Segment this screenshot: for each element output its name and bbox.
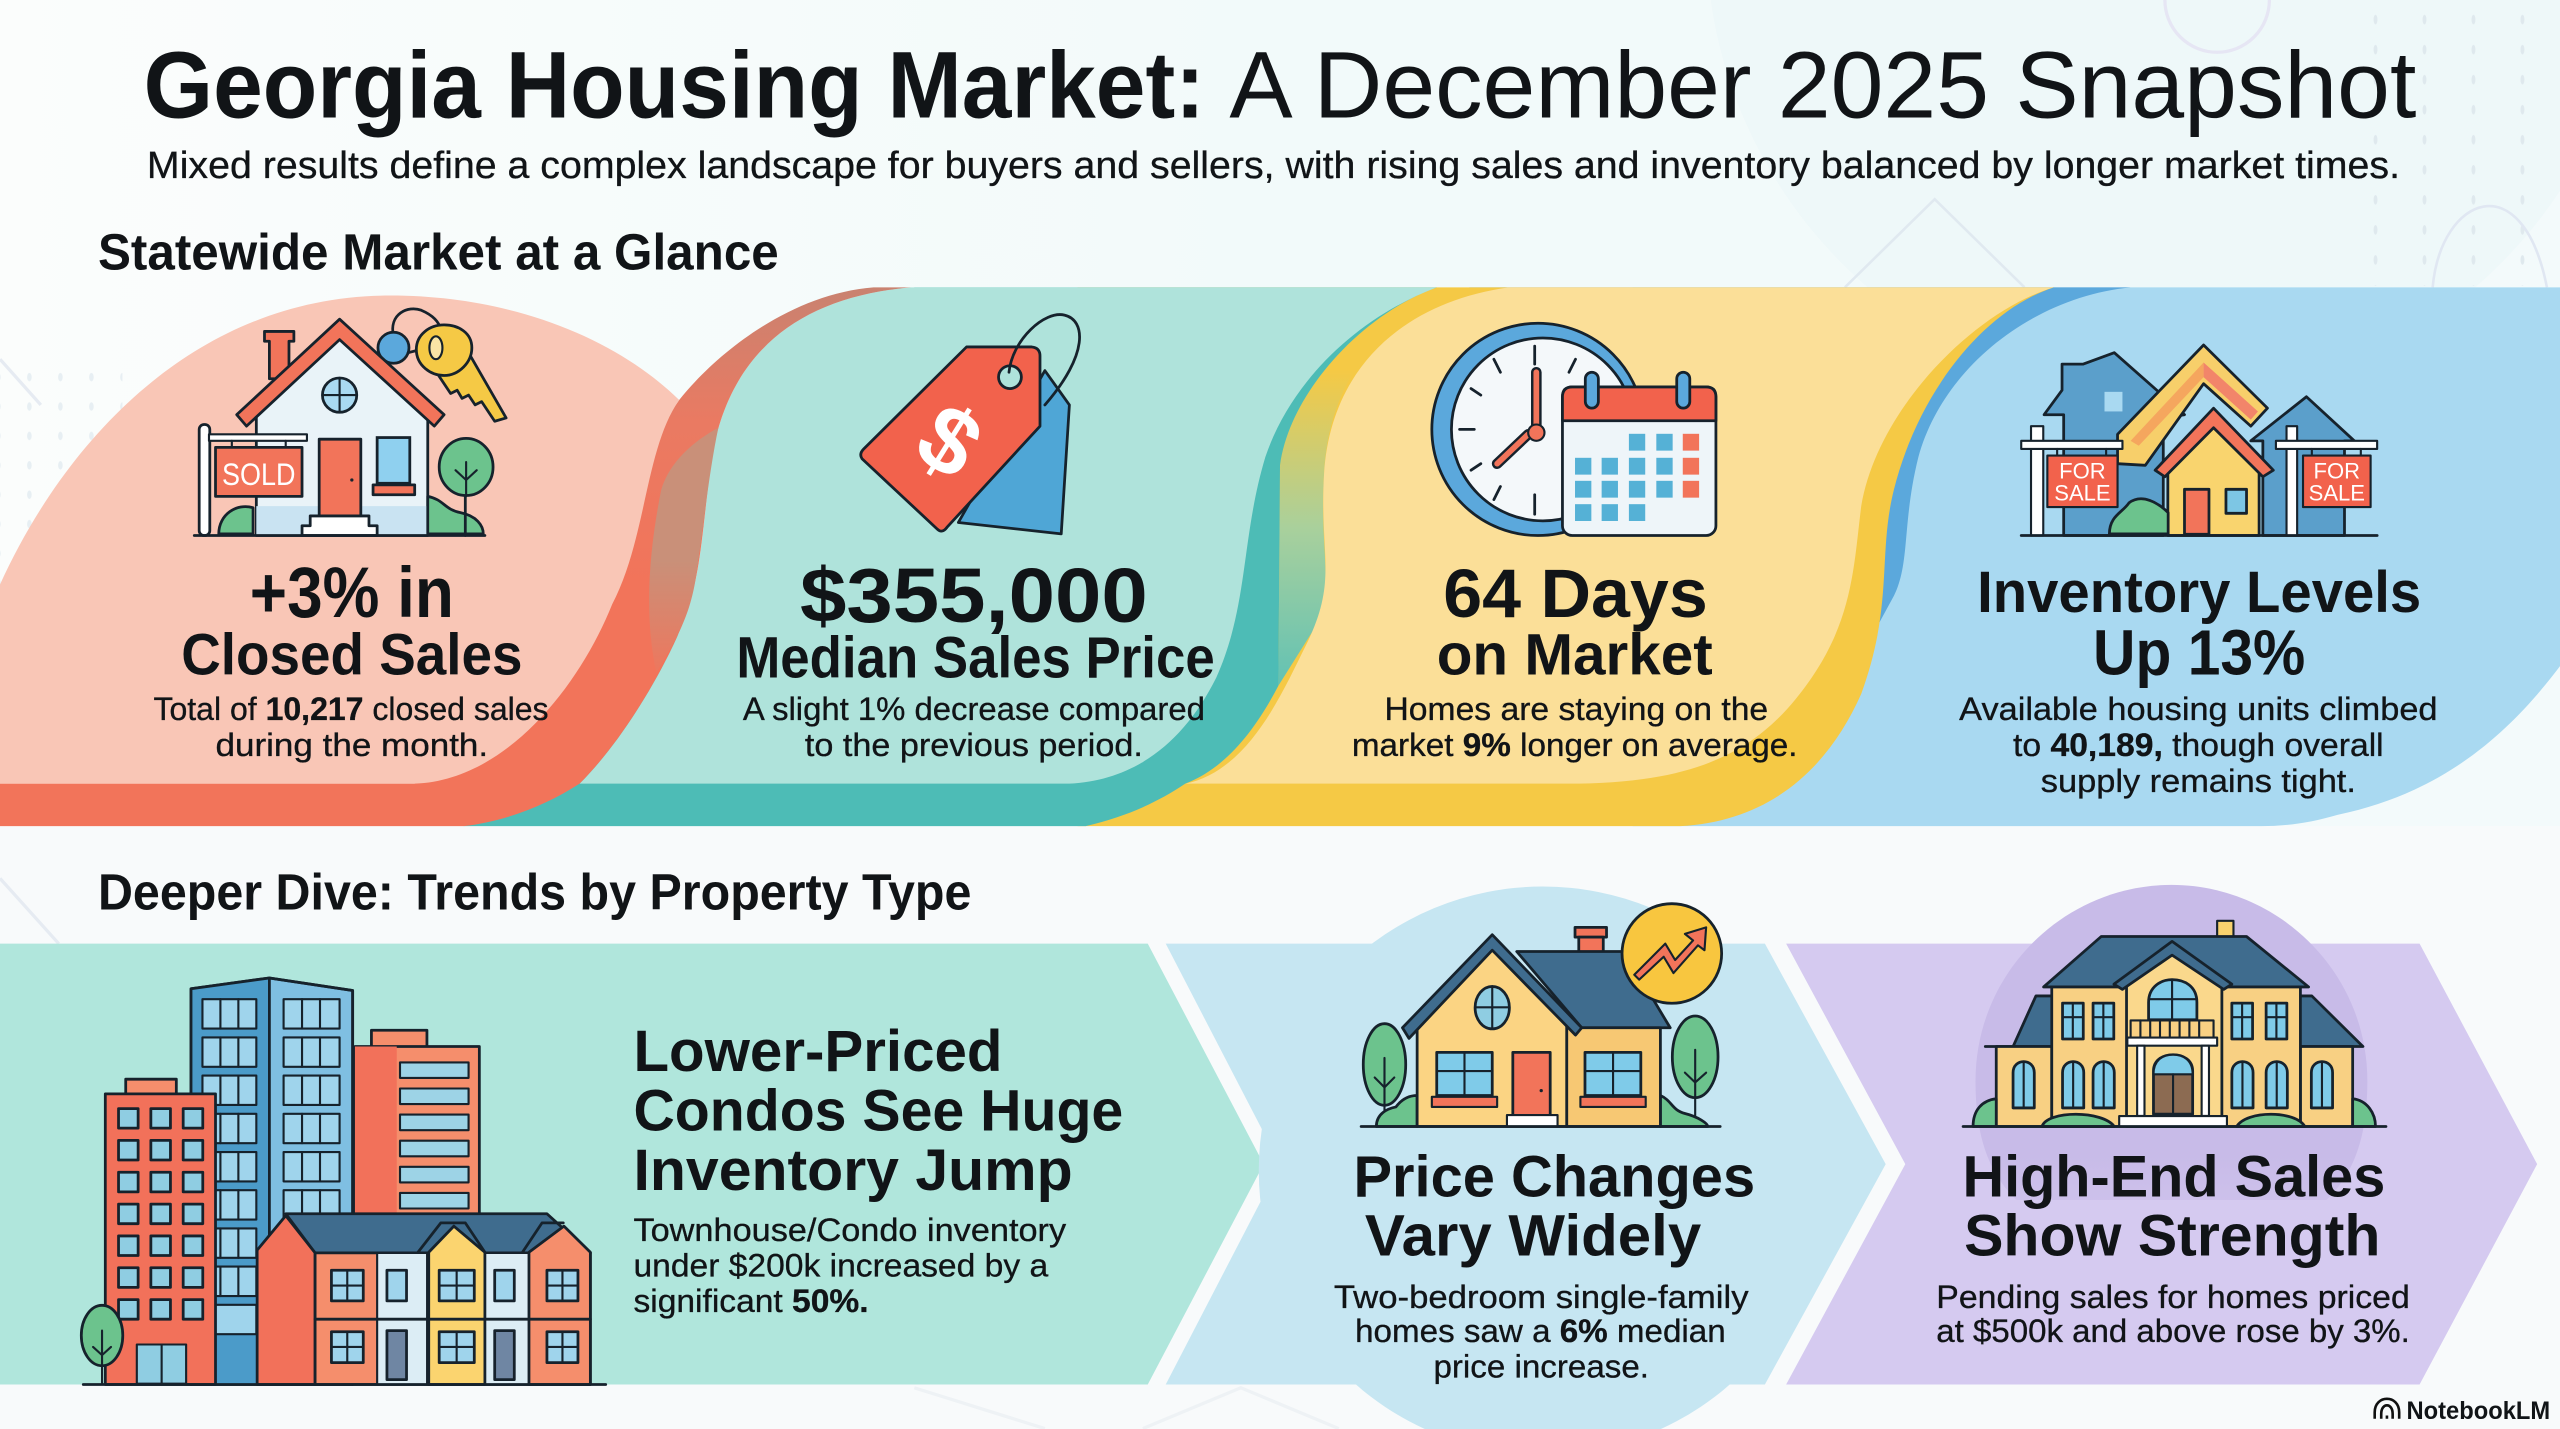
heading: lower-priced condos: Condos See Huge [633,1079,1123,1144]
icon: condo buildings [81,978,606,1384]
panel: high-end sales [1786,885,2537,1384]
icon: for-sale houses [2021,345,2377,536]
heading: lower-priced condos: Inventory Jump [633,1138,1073,1203]
text: price changes detail [1334,1278,1749,1384]
text: median price detail: A slight 1% decrease compared [743,690,1205,727]
stat: inventory [1977,560,2421,688]
text: condos detail: under $200k increased by a [633,1247,1049,1284]
icon: sold house with keys: SOLD [222,457,296,492]
panel: median sales price [736,315,1215,763]
stat: closed sales: Closed Sales [181,622,522,687]
text: condos detail [633,1211,1067,1319]
heading: price changes: Vary Widely [1365,1204,1702,1269]
title: A December 2025 Snapshot [1229,33,2416,139]
heading: high-end sales [1962,1145,2385,1269]
stat: inventory: Up 13% [2093,617,2305,688]
text: high-end detail [1936,1278,2410,1349]
title: Georgia Housing Market: [144,33,1205,139]
text: high-end detail: Pending sales for homes priced [1936,1278,2410,1315]
text: condos detail: Townhouse/Condo inventory [633,1211,1067,1248]
icon: for-sale houses: SALE [2054,480,2111,505]
heading: deeper dive: Deeper Dive: Trends by Property Type [98,863,971,920]
panel: inventory levels [1959,345,2438,799]
text: condos detail: significant 50%. [633,1282,869,1319]
subtitle: Mixed results define a complex landscape for buyers and sellers, with rising sales and inventory balanced by longer market times. [147,144,2400,187]
title [144,33,2416,139]
panel: days on market [1352,323,1798,763]
icon: clock and calendar [1432,323,1716,536]
statewide band shapes [0,287,2560,826]
icon: for-sale houses: FOR [2314,458,2360,483]
stat: median price [736,554,1215,691]
stat: closed sales: +3% in [250,553,454,633]
text: closed sales detail: Total of 10,217 closed sales [153,690,549,727]
text: high-end detail: at $500k and above rose by 3%. [1936,1312,2410,1349]
icon: house with rising price [1361,904,1722,1127]
text: price changes detail: Two-bedroom single-family [1334,1278,1749,1315]
text: inventory detail: Available housing units climbed [1959,690,2438,727]
heading: lower-priced condos: Lower-Priced [633,1019,1002,1084]
text: price changes detail: homes saw a 6% median [1355,1312,1726,1349]
text: closed sales detail [153,690,549,763]
stat: days on market: on Market [1437,622,1713,687]
backdrop: lavender circle and chevron [1786,885,2537,1384]
panel: closed sales [153,309,549,763]
heading: price changes: Price Changes [1353,1145,1755,1210]
backdrop: blue circle and chevron [1166,887,1886,1429]
icon: for-sale houses: FOR [2059,458,2106,483]
stat: median price: Median Sales Price [736,626,1215,691]
stat: days on market [1437,555,1713,687]
text: days on market detail: market 9% longer on average. [1352,726,1798,763]
text: inventory detail: to 40,189, though overall [2013,726,2384,763]
heading: high-end sales: Show Strength [1964,1204,2380,1269]
stat: median price: $355,000 [800,554,1148,639]
panel: price changes [1166,887,1886,1429]
text: days on market detail: Homes are staying on the [1384,690,1768,727]
text: median price detail: to the previous period. [805,726,1143,763]
text: inventory detail: supply remains tight. [2041,762,2356,799]
text: closed sales detail: during the month. [216,726,488,763]
stat: days on market: 64 Days [1443,555,1708,632]
text: days on market detail [1352,690,1798,763]
heading: statewide market: Statewide Market at a Glance [98,223,779,280]
stat: closed sales [181,553,522,687]
chevron: mint [0,944,1264,1384]
icon: for-sale houses: SALE [2309,480,2365,505]
heading: lower-priced condos [633,1019,1123,1203]
icon: mansion [1963,921,2386,1127]
icon: price tag: $ [899,382,1000,500]
logo: NotebookLM: NotebookLM [2407,1397,2550,1425]
icon: price tag [861,315,1080,534]
panel: lower-priced condos [0,944,1264,1384]
text: price changes detail: price increase. [1433,1347,1649,1384]
text: inventory detail [1959,690,2438,799]
stat: inventory: Inventory Levels [1977,560,2421,625]
icon: sold house with keys [194,309,506,536]
text: median price detail [743,690,1205,763]
heading: high-end sales: High-End Sales [1962,1145,2385,1210]
heading: price changes [1353,1145,1755,1269]
